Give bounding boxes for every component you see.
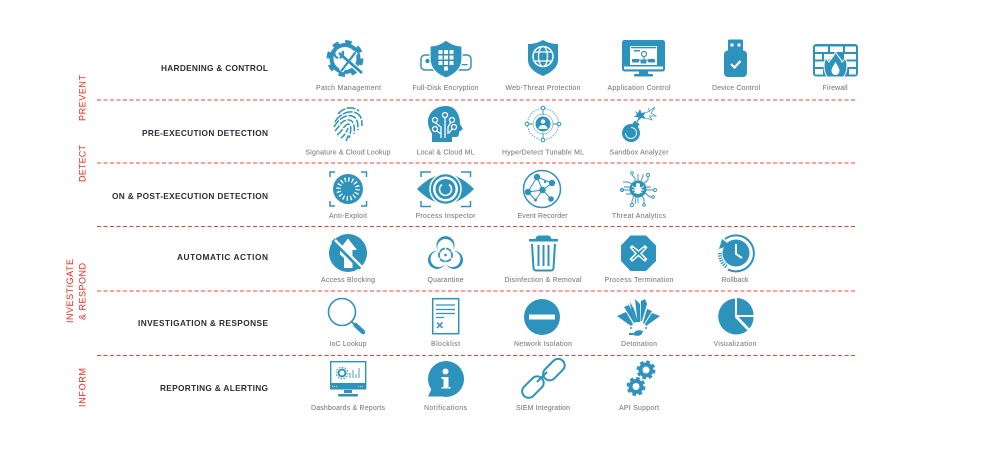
icon: fingerprint (334, 108, 362, 141)
icon: siem integration chain link (520, 356, 567, 400)
heading: automatic action: AUTOMATIC ACTION (177, 252, 268, 262)
icon: process inspector eye (417, 172, 474, 206)
category: investigate and respond (65, 259, 88, 323)
category: investigate and respond: INVESTIGATE (65, 259, 75, 323)
category: detect: DETECT (78, 144, 88, 182)
label: patch management: Patch Management (316, 85, 381, 92)
icon: ioc lookup magnifier (328, 298, 363, 332)
icon: patch management gear (328, 42, 363, 75)
label: quarantine: Quarantine (428, 277, 464, 284)
label: process inspector: Process Inspector (416, 213, 476, 220)
icon: notifications speech bubble (428, 361, 464, 397)
label: rollback: Rollback (722, 277, 749, 284)
label: blocklist: Blocklist (431, 341, 460, 348)
icon: access blocking (329, 234, 367, 272)
category: investigate and respond: & RESPOND (78, 262, 88, 320)
icon: threat analytics chip (620, 172, 656, 206)
icon: detonation blast (617, 299, 660, 336)
label: api support: API Support (619, 405, 659, 412)
icon: hyperdetect target (525, 106, 561, 142)
heading: on and post-execution detection: ON & POST-EXECUTION DETECTION (112, 191, 268, 201)
label: process termination: Process Termination (604, 277, 674, 284)
icon: device control usb (724, 39, 747, 77)
icon: full-disk encryption shield (421, 40, 471, 78)
icon: api support gears (628, 362, 654, 394)
label: signature and cloud lookup: Signature & Cloud Lookup (306, 150, 391, 156)
label: disinfection and removal: Disinfection & Removal (504, 277, 582, 284)
icon: rollback clock (719, 235, 754, 271)
label: local and cloud ml: Local & Cloud ML (416, 150, 475, 156)
heading: pre-execution detection: PRE-EXECUTION DETECTION (142, 128, 268, 138)
label: dashboards and reports: Dashboards & Reports (311, 405, 386, 412)
label: event recorder: Event Recorder (518, 213, 568, 220)
heading: hardening and control: HARDENING & CONTROL (161, 63, 268, 73)
icon: network isolation (524, 299, 560, 335)
label: full-disk encryption: Full-Disk Encryption (412, 85, 479, 92)
icon: visualization pie chart (718, 298, 754, 334)
label: hyperdetect tunable ml: HyperDetect Tunable ML (502, 150, 584, 156)
icon: web-threat protection shield (528, 40, 558, 76)
label: sandbox analyzer: Sandbox Analyzer (610, 150, 669, 156)
icon: anti-exploit (330, 172, 366, 206)
icon: application control monitor (622, 40, 665, 76)
label: threat analytics: Threat Analytics (612, 213, 667, 220)
label: visualization: Visualization (714, 341, 757, 348)
category: prevent: PREVENT (78, 74, 88, 121)
category: inform: INFORM (78, 368, 88, 407)
label: anti-exploit: Anti-Exploit (329, 213, 367, 220)
label: web-threat protection: Web-Threat Protection (506, 85, 581, 92)
heading: investigation and response: INVESTIGATION & RESPONSE (138, 318, 268, 328)
label: access blocking: Access Blocking (321, 277, 375, 284)
label: device control: Device Control (712, 85, 760, 92)
label: notifications: Notifications (424, 405, 468, 412)
icon: quarantine biohazard (424, 236, 467, 273)
icon: dashboards monitor (330, 362, 366, 396)
icon: machine learning head (428, 106, 463, 142)
icon: sandbox analyzer bomb (622, 107, 656, 142)
label: detonation: Detonation (621, 341, 657, 348)
icon: blocklist document (433, 299, 459, 334)
heading: reporting and alerting: REPORTING & ALERTING (160, 383, 268, 393)
label: ioc lookup: IoC Lookup (330, 341, 367, 348)
icon: event recorder network (524, 170, 560, 208)
label: siem integration: SIEM Integration (516, 405, 570, 412)
label: firewall: Firewall (822, 85, 848, 92)
icon: firewall with flame (813, 44, 858, 77)
icon: process termination octagon (621, 236, 656, 271)
icon: disinfection trash can (529, 236, 558, 270)
label: application control: Application Control (608, 85, 671, 92)
label: network isolation: Network Isolation (514, 341, 572, 348)
